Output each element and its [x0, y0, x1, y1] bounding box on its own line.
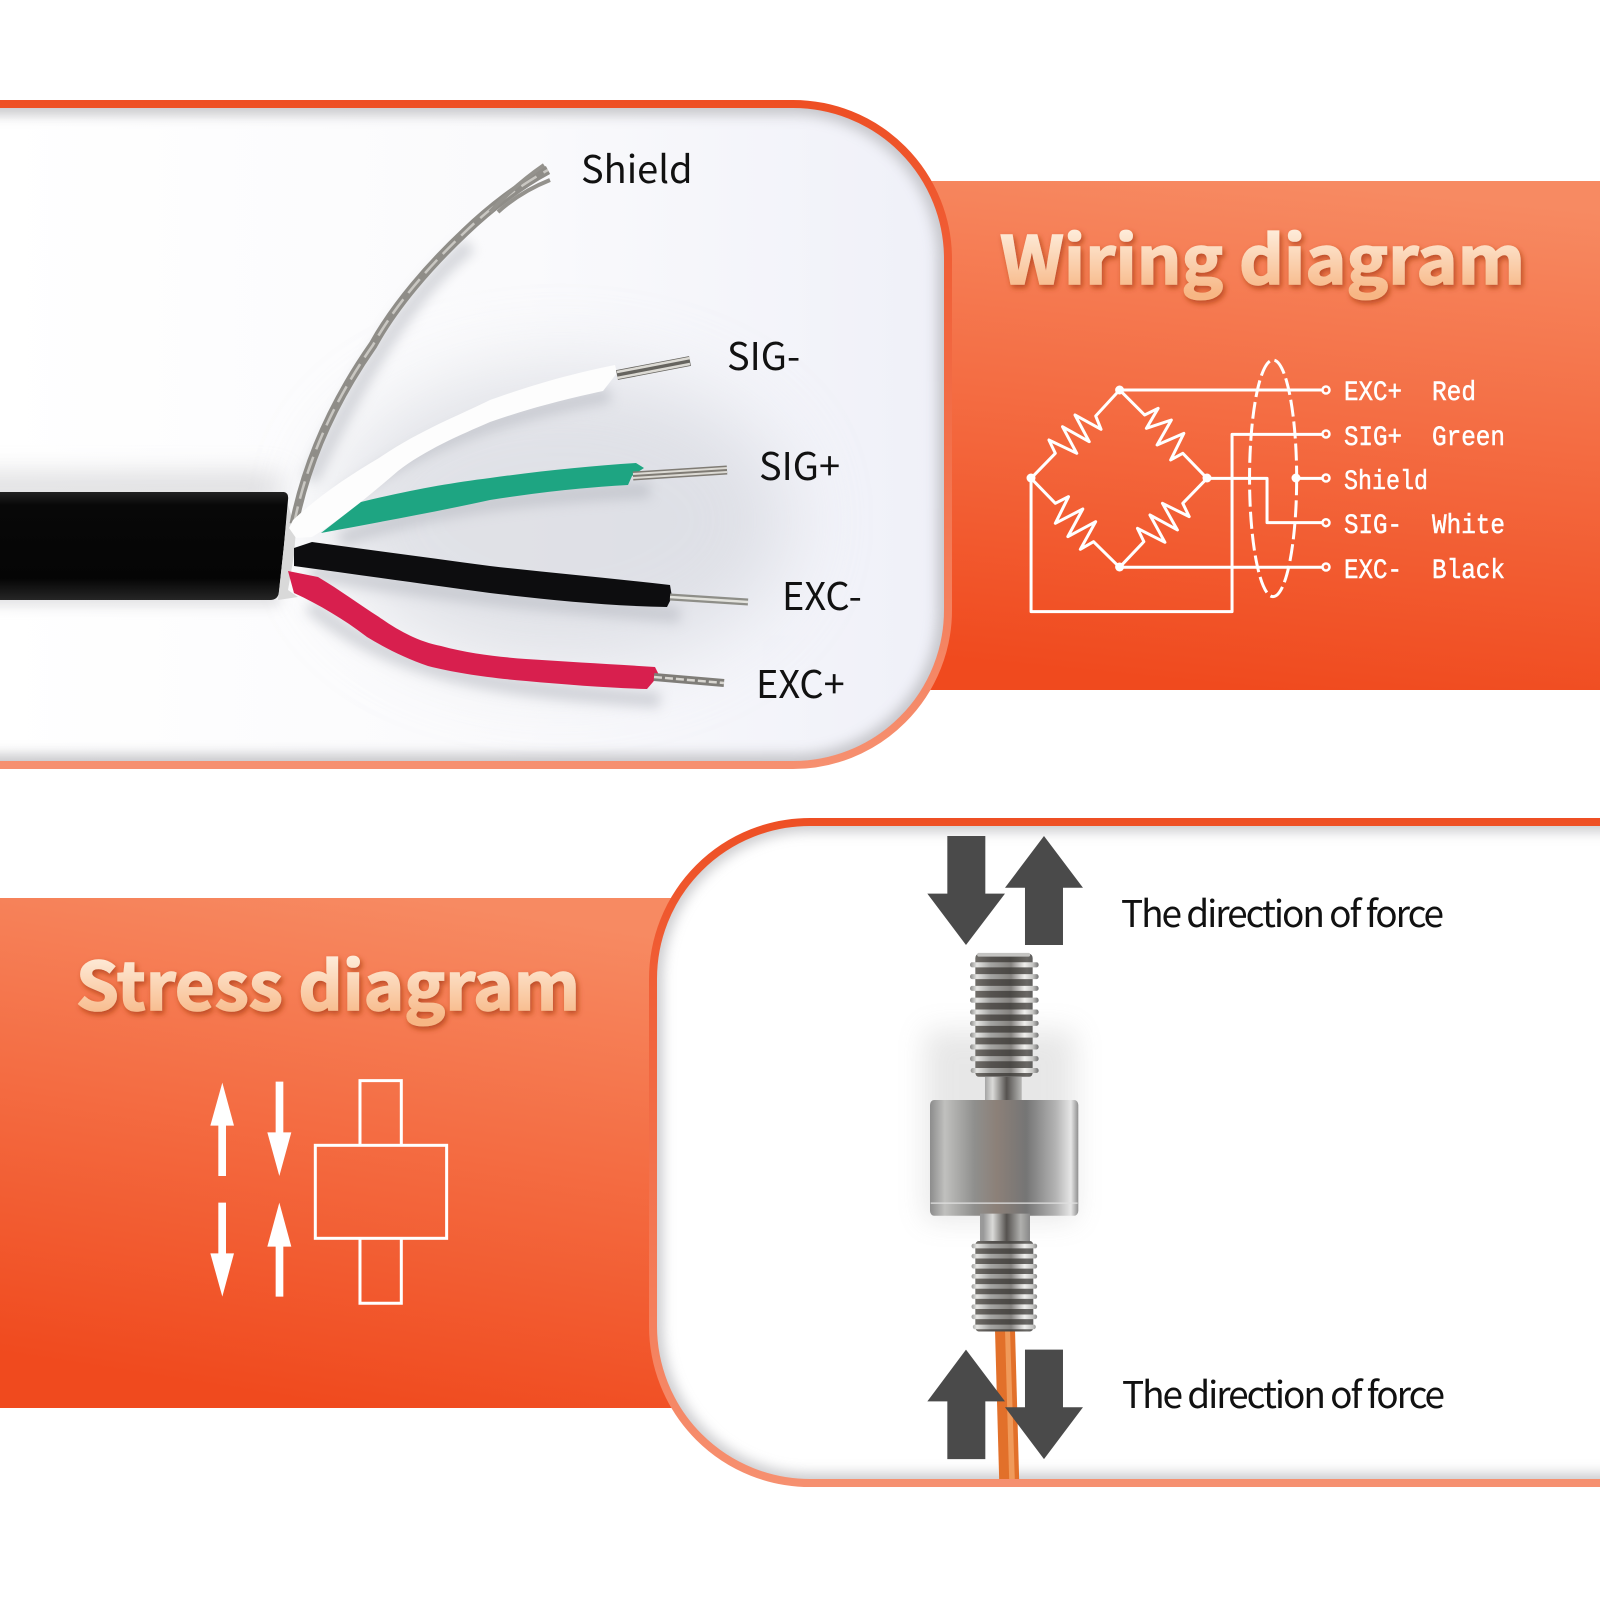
wire labels: SIG+	[759, 436, 840, 491]
black wire	[294, 542, 672, 607]
wiring schematic: Black	[1432, 556, 1505, 587]
wiring schematic: EXC+	[1344, 378, 1402, 409]
heading: Wiring diagram: Wiring diagram	[1000, 208, 1525, 304]
wire shadows	[310, 245, 680, 700]
wiring schematic: SIG-	[1344, 511, 1402, 542]
wiring schematic: Red	[1432, 378, 1476, 409]
heading: Stress diagram: Stress diagram	[76, 934, 580, 1030]
wire labels: EXC+	[756, 654, 845, 709]
wiring schematic: Shield	[1344, 467, 1428, 498]
label: force bottom: The direction of force	[1122, 1365, 1445, 1419]
wiring schematic	[1026, 360, 1505, 612]
photo: load cell sensor	[653, 822, 1600, 1485]
force arrows: top	[927, 836, 1083, 945]
panel: cable photo	[0, 104, 948, 765]
wiring schematic: White	[1432, 511, 1505, 542]
photo: stripped cable	[0, 104, 948, 765]
panel: stress band	[0, 898, 700, 1408]
red wire	[288, 571, 659, 689]
panel: wiring band	[900, 181, 1600, 690]
shield strands	[294, 165, 550, 524]
foil	[278, 505, 298, 600]
cable jacket	[0, 492, 288, 600]
force arrows: bottom	[927, 1350, 1083, 1459]
wire labels: Shield	[581, 139, 693, 194]
white wire	[289, 365, 617, 538]
wire labels	[581, 139, 862, 709]
soft background shading	[330, 370, 790, 670]
wiring schematic: EXC-	[1344, 556, 1402, 587]
green wire	[321, 463, 644, 533]
wiring schematic: Green	[1432, 423, 1505, 454]
label: force top: The direction of force	[1121, 884, 1444, 938]
panel: sensor photo	[653, 822, 1600, 1485]
wire labels: SIG-	[727, 326, 800, 381]
wiring schematic: SIG+	[1344, 423, 1402, 454]
stress schematic	[210, 1081, 447, 1303]
wire labels: EXC-	[782, 566, 862, 621]
